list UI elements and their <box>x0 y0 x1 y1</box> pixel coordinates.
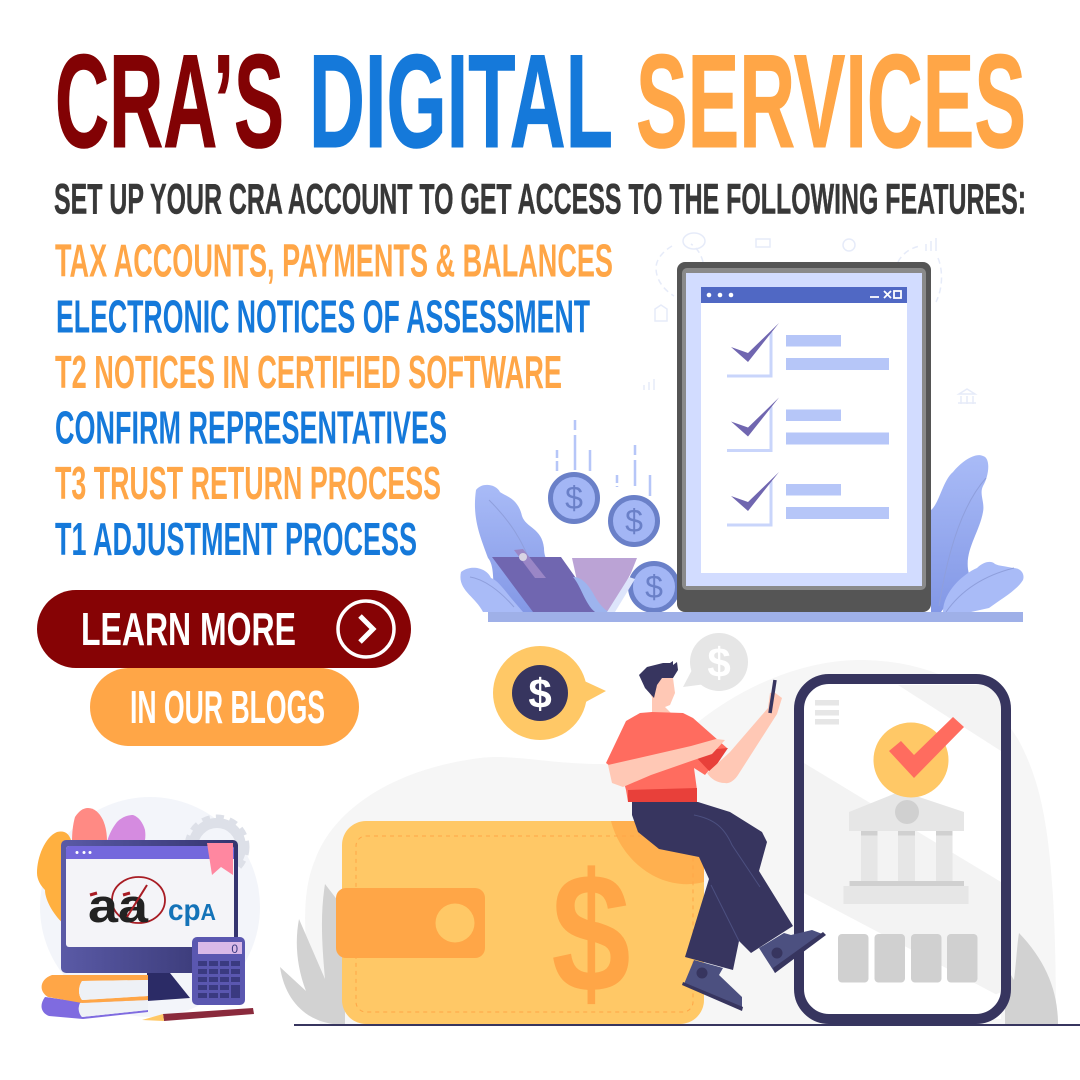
logo: aa <box>88 879 149 932</box>
gear <box>187 817 247 877</box>
checklist row 2 <box>727 398 889 450</box>
logo <box>88 877 216 932</box>
bank <box>844 791 968 904</box>
stand <box>147 973 190 1001</box>
calculator <box>192 937 245 1005</box>
wallet <box>336 821 704 1028</box>
phone <box>799 679 1006 1019</box>
feature list: TAX ACCOUNTS, PAYMENTS & BALANCES <box>55 234 613 286</box>
illustration: tablet checklist <box>460 233 1024 622</box>
illustration: tablet checklist: $ <box>645 569 663 605</box>
button: learn more <box>37 590 411 668</box>
illustration: tablet checklist: $ <box>565 480 583 516</box>
approved check <box>874 717 964 798</box>
monitor <box>61 840 238 973</box>
books <box>42 975 148 1019</box>
tablet body <box>677 262 931 612</box>
bookmark <box>207 843 233 875</box>
title: DIGITAL <box>309 28 613 176</box>
bubble: coin: $ <box>528 670 552 717</box>
open wallet <box>572 558 637 612</box>
feature list <box>55 234 613 565</box>
feature list: T2 NOTICES IN CERTIFIED SOFTWARE <box>55 346 562 398</box>
background hills <box>305 660 1056 1024</box>
illustration: tablet checklist: $ <box>625 503 643 539</box>
button: in our blogs <box>90 668 359 746</box>
feature list: ELECTRONIC NOTICES OF ASSESSMENT <box>56 290 590 342</box>
feature list: T3 TRUST RETURN PROCESS <box>55 457 441 509</box>
bubble: grey <box>683 633 748 691</box>
illustration: person, wallet and phone <box>280 633 1080 1028</box>
leaves <box>37 831 71 925</box>
calculator: 0 <box>231 942 238 956</box>
button: in our blogs: IN OUR BLOGS <box>130 681 325 733</box>
illustration: monitor with logo, books and calculator <box>37 797 260 1021</box>
grey plants <box>280 884 345 1024</box>
ground line <box>294 1024 1080 1026</box>
bubble: coin <box>493 646 606 740</box>
wallet: $ <box>551 839 631 1028</box>
window title bar <box>701 287 907 303</box>
faint background icons <box>644 233 976 404</box>
bubble: grey: $ <box>707 639 731 686</box>
button: learn more: LEARN MORE <box>81 603 296 655</box>
keypad tiles <box>838 934 978 982</box>
feature list: T1 ADJUSTMENT PROCESS <box>55 513 417 565</box>
checklist row 1 <box>727 323 889 376</box>
feature list: CONFIRM REPRESENTATIVES <box>55 402 447 454</box>
checklist row 3 <box>727 472 889 525</box>
pencil <box>142 1008 254 1021</box>
coin speed lines <box>557 420 650 496</box>
coins <box>550 474 678 610</box>
shelf <box>488 612 1023 622</box>
title: CRA’S <box>55 28 284 176</box>
person <box>606 661 826 1011</box>
title <box>55 28 1026 176</box>
logo: cpA <box>168 894 216 927</box>
leaves <box>460 455 1024 612</box>
